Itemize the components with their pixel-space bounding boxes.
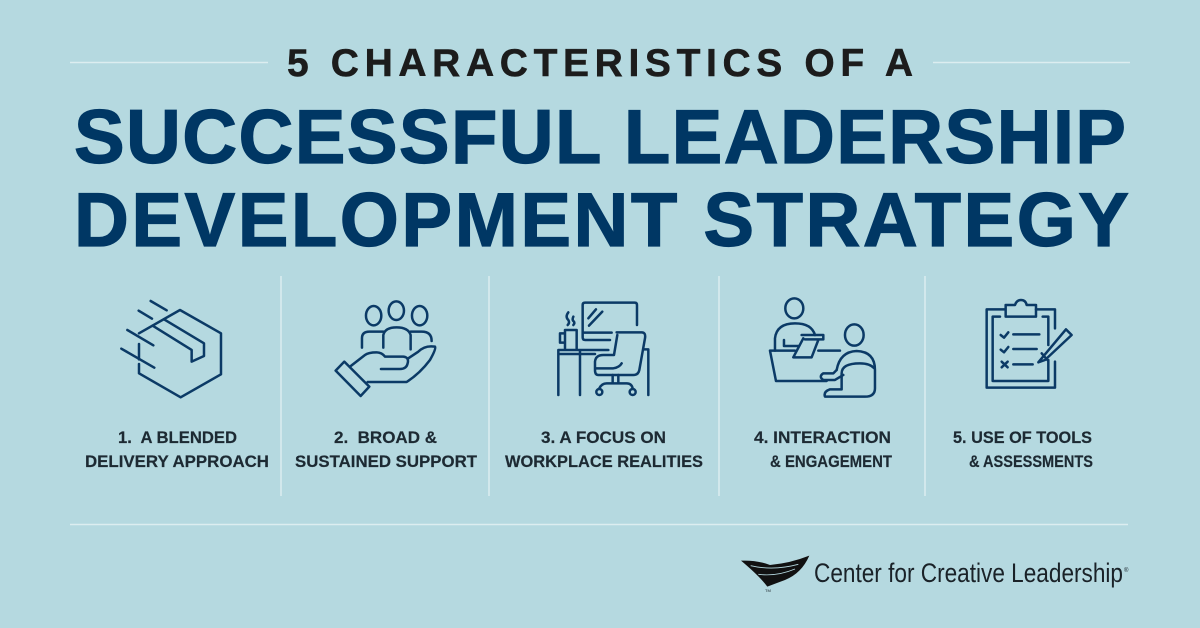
title: main heading: DEVELOPMENT STRATEGY <box>74 178 1129 263</box>
label: workplace realities: WORKPLACE REALITIES <box>505 452 703 471</box>
logo: center for creative leadership <box>741 556 1129 593</box>
label: broad support: SUSTAINED SUPPORT <box>295 452 478 471</box>
logo: center for creative leadership: ® <box>1124 567 1129 574</box>
title: main heading: SUCCESSFUL LEADERSHIP <box>74 95 1126 180</box>
icon: box in motion <box>121 301 221 397</box>
icon: two people talking <box>770 298 875 397</box>
icon: desk with computer <box>558 303 648 395</box>
label: blended delivery <box>85 428 269 471</box>
label: tools and assessments: 5. USE OF TOOLS <box>953 428 1092 447</box>
icon: hand holding people <box>336 301 435 396</box>
logo: center for creative leadership: Center for Creative Leadership <box>814 558 1123 588</box>
label: interaction and engagement: & ENGAGEMENT <box>770 452 893 471</box>
icon: clipboard checklist <box>987 300 1072 388</box>
label: tools and assessments <box>953 428 1093 471</box>
label: tools and assessments: & ASSESSMENTS <box>969 452 1093 471</box>
label: broad support: 2. BROAD & <box>334 428 437 447</box>
title: main heading <box>74 95 1129 263</box>
logo: center for creative leadership: TM <box>765 588 771 593</box>
title: 5 characteristics of a: 5 CHARACTERISTICS OF A <box>287 42 913 85</box>
label: blended delivery: 1. A BLENDED <box>118 428 237 447</box>
label: broad support <box>295 428 478 471</box>
label: workplace realities <box>505 428 703 471</box>
logo mark: wing <box>741 556 809 587</box>
label: blended delivery: DELIVERY APPROACH <box>85 452 269 471</box>
label: interaction and engagement <box>754 428 893 471</box>
label: workplace realities: 3. A FOCUS ON <box>541 428 666 447</box>
label: interaction and engagement: 4. INTERACTION <box>754 428 891 447</box>
